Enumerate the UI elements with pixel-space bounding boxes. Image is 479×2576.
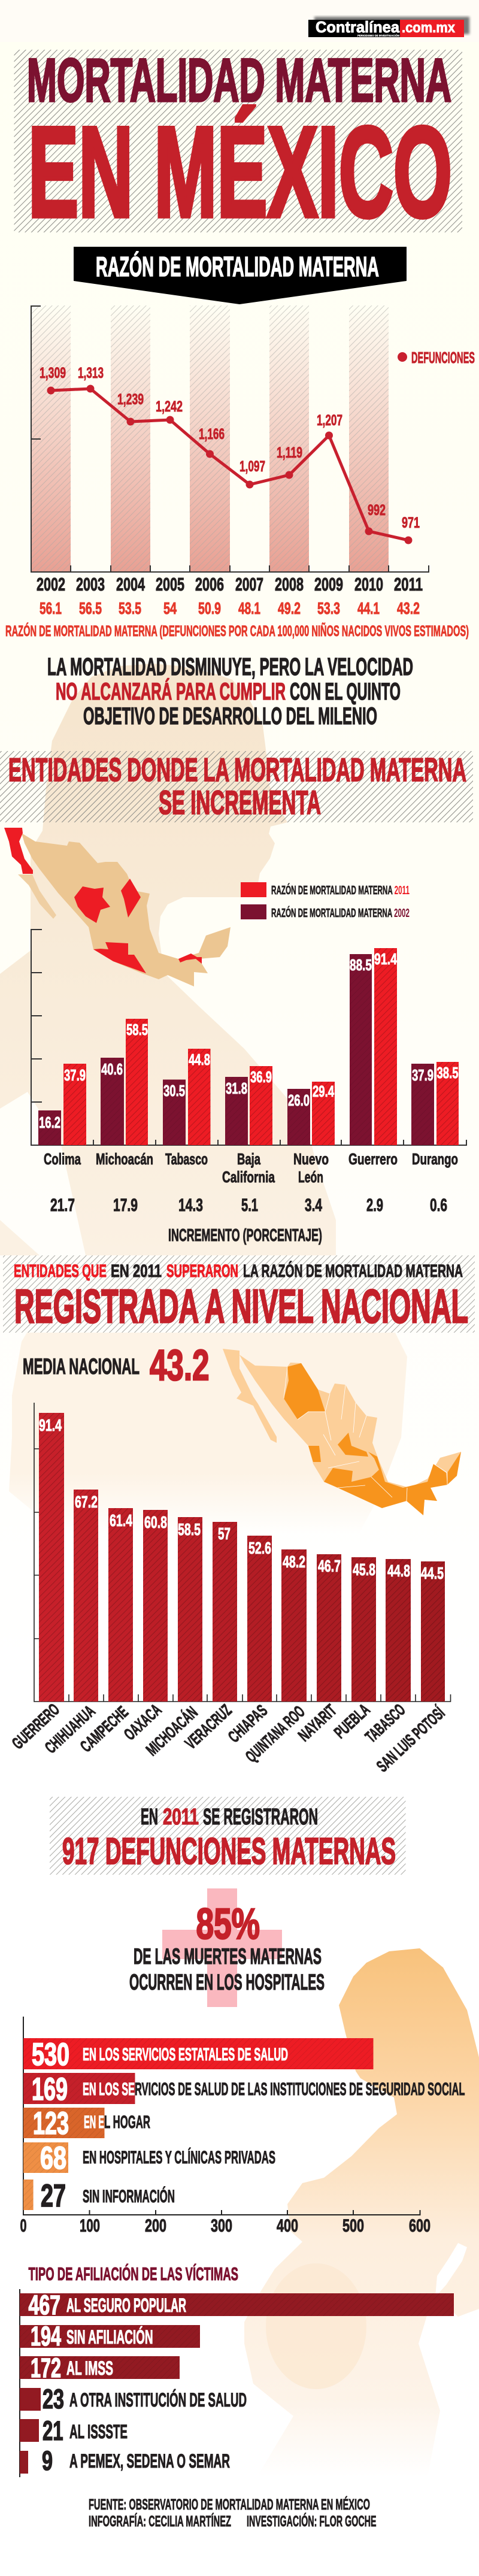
axis labels: 400 [277, 2216, 298, 2236]
year labels: 2008 [275, 574, 304, 595]
bar: 23: A OTRA INSTITUCIÓN DE SALUD [69, 2389, 247, 2411]
increment values: 5.1 [241, 1195, 258, 1215]
map: entidades con incremento [4, 828, 231, 986]
rate values: 54 [163, 599, 177, 617]
bar: 467 [20, 2290, 454, 2320]
bar: 21 [20, 2415, 128, 2446]
bar: 530: EN LOS SERVICIOS ESTATALES DE SALUD [83, 2045, 288, 2065]
year labels: 2006 [195, 574, 224, 595]
bar: 172: AL IMSS [66, 2357, 113, 2379]
axes [34, 1403, 450, 1702]
rate values: 48.1 [238, 599, 260, 617]
data labels: 1,239 [117, 391, 144, 408]
Durango bars: 38.5 [437, 1064, 459, 1082]
data labels: 1,242 [156, 398, 183, 415]
footer credits [89, 2496, 376, 2530]
Colima bars: 16.2 [39, 1113, 60, 1131]
bar values: 48.2 [283, 1552, 305, 1571]
rotated state labels: GUERRERO [8, 1700, 63, 1752]
rate values [40, 599, 420, 617]
state labels: Guerrero [348, 1150, 398, 1168]
state labels: Nuevo [293, 1150, 329, 1168]
bar values: 58.5 [178, 1520, 201, 1539]
text block: mortalidad disminuye: CON EL QUINTO [290, 679, 401, 705]
heading: tipo de afiliación: TIPO DE AFILIACIÓN DE LAS VÍCTIMAS [29, 2263, 238, 2284]
state labels: Michoacán [96, 1150, 153, 1168]
rotated state labels: QUINTANA ROO [242, 1702, 308, 1766]
text block: mortalidad disminuye [47, 653, 413, 729]
rotated state labels: OAXACA [120, 1700, 165, 1743]
Michoacán bars: 58.5 [126, 1021, 148, 1039]
year labels: 2007 [235, 574, 263, 595]
legend: razón 2011 y 2002: RAZÓN DE MORTALIDAD MATERNA 2002 [271, 906, 410, 920]
bar values: 52.6 [248, 1539, 271, 1557]
year labels [37, 574, 423, 595]
logo: contralinea.com.mx: .com.mx [402, 20, 456, 36]
bar: 68 [23, 2141, 275, 2176]
Durango bars [411, 1062, 459, 1145]
bar: 21: 21 [43, 2415, 63, 2446]
increment values: 3.4 [305, 1195, 322, 1215]
increment values: 2.9 [366, 1195, 383, 1215]
bar: 123: L HOGAR [104, 2112, 150, 2132]
axis labels: 100 [80, 2216, 100, 2236]
bar: 123: 123 [33, 2106, 69, 2141]
bar: 169: 169 [32, 2072, 68, 2107]
bar chart: entidades 2002 vs 2011 [31, 930, 466, 1245]
rate values: 53.3 [317, 599, 340, 617]
line chart: defunciones [5, 305, 475, 640]
Tabasco bars: 44.8 [189, 1051, 210, 1068]
state labels: Tabasco [165, 1150, 208, 1168]
rotated state labels: PUEBLA [331, 1700, 374, 1742]
bar values: 67.2 [75, 1493, 98, 1511]
increment values [50, 1195, 447, 1215]
icon: hospital cross [162, 1888, 282, 2007]
Michoacán bars [101, 1019, 148, 1145]
heading panel: registrada a nivel nacional: SUPERARON [166, 1261, 238, 1281]
rotated state labels: CAMPECHE [77, 1703, 132, 1755]
logo: contralinea.com.mx [308, 17, 469, 37]
rate values: 43.2 [397, 599, 420, 617]
rate values: 50.9 [198, 599, 221, 617]
rotated state labels [8, 1700, 448, 1775]
rotated state labels: CHIAPAS [225, 1701, 271, 1746]
data labels: 971 [402, 514, 420, 531]
text block: 85%: 85% [196, 1900, 260, 1948]
data labels: 1,166 [199, 426, 225, 443]
Nuevo León bars: 29.4 [313, 1082, 334, 1100]
data labels: 1,313 [78, 365, 104, 382]
Guerrero bars: 88.5 [350, 956, 372, 974]
increment values: 14.3 [178, 1195, 203, 1215]
Guerrero bars [350, 948, 397, 1145]
axis labels [20, 2216, 431, 2236]
bar: 9 [20, 2445, 230, 2476]
bar values: 61.4 [110, 1511, 132, 1530]
bars [39, 1413, 445, 1702]
bar values: 60.8 [144, 1513, 167, 1531]
map: entidades que superan la media [223, 1349, 461, 1515]
bar values: 44.8 [387, 1561, 410, 1580]
text block: 85%: OCURREN EN LOS HOSPITALES [129, 1970, 325, 1994]
data labels: 1,097 [240, 458, 265, 475]
bar: 172 [20, 2353, 180, 2383]
legend: razón 2011 y 2002 [241, 882, 410, 920]
data labels: 1,207 [317, 412, 342, 429]
legend: razón 2011 y 2002: RAZÓN DE MORTALIDAD MATERNA 2011 [271, 883, 410, 897]
bar chart: entidades sobre la media [8, 1403, 451, 1775]
state labels: León [298, 1168, 323, 1186]
Baja California bars [225, 1066, 272, 1145]
heading panel: registrada a nivel nacional [3, 1255, 475, 1333]
Guerrero bars: 91.4 [374, 950, 397, 968]
rotated state labels: CHIHUAHUA [41, 1702, 99, 1757]
rotated state labels: MICHOACÁN [143, 1703, 201, 1759]
Baja California bars: 36.9 [250, 1068, 272, 1086]
data labels: 992 [368, 502, 386, 519]
bar: 9: A PEMEX, SEDENA O SEMAR [69, 2450, 230, 2472]
logo: contralinea.com.mx: PERIODISMO DE INVESTIGACIÓN [357, 33, 399, 37]
bar: 23 [20, 2384, 247, 2414]
title panel [14, 46, 462, 244]
axis labels: 0 [20, 2216, 26, 2236]
bar values [39, 1416, 444, 1582]
Colima bars [38, 1064, 86, 1145]
state labels: Durango [412, 1150, 458, 1168]
increment caption: INCREMENTO (PORCENTAJE) [168, 1226, 322, 1245]
Colima bars: 37.9 [64, 1066, 86, 1084]
data labels: 1,309 [40, 365, 66, 382]
heading panel: entidades donde se incrementa: SE INCREMENTA [159, 783, 321, 821]
data labels [40, 365, 420, 531]
year labels: 2004 [116, 574, 145, 595]
striped year bands [31, 305, 389, 572]
bar: 123 [23, 2106, 150, 2141]
state labels [44, 1150, 458, 1186]
heading panel: registrada a nivel nacional: ENTIDADES QUE [14, 1261, 107, 1281]
axis [19, 2289, 20, 2477]
Tabasco bars [163, 1049, 211, 1145]
bar: 169 [23, 2072, 465, 2107]
bar values: 45.8 [353, 1560, 375, 1579]
bar: 467: 467 [29, 2290, 60, 2320]
panel: 917 defunciones maternas: SE REGISTRARON [203, 1805, 318, 1830]
text block: 85%: DE LAS MUERTES MATERNAS [134, 1944, 322, 1969]
bar: 21: AL ISSSTE [69, 2421, 128, 2442]
bar: 172: 172 [31, 2353, 61, 2383]
state labels: Baja [237, 1150, 260, 1168]
bar: 194 [20, 2321, 200, 2351]
bar: 23: 23 [43, 2384, 64, 2414]
bar: 123: EN E [84, 2112, 104, 2132]
Michoacán bars: 40.6 [101, 1060, 123, 1078]
heading panel: entidades donde se incrementa [0, 751, 473, 822]
axis labels: 300 [211, 2216, 232, 2236]
panel: 917 defunciones maternas [50, 1797, 406, 1875]
rate values: 56.5 [79, 599, 102, 617]
rotated state labels: VERACRUZ [181, 1701, 235, 1752]
rate values: 49.2 [278, 599, 301, 617]
panel: 917 defunciones maternas: EN [141, 1805, 158, 1830]
footer credits: INFOGRAFÍA: CECILIA MARTÍNEZ [89, 2513, 231, 2530]
media nacional: MEDIA NACIONAL [23, 1354, 140, 1379]
year labels: 2011 [394, 574, 423, 595]
state labels: Colima [44, 1150, 81, 1168]
bar: 194: SIN AFILIACIÓN [66, 2326, 153, 2348]
bar values: 91.4 [39, 1416, 62, 1434]
bar: 27: SIN INFORMACIÓN [83, 2186, 175, 2206]
bar: 27: 27 [41, 2178, 66, 2214]
bar: 467: AL SEGURO POPULAR [66, 2295, 186, 2316]
data line [47, 385, 412, 544]
increment values: 21.7 [50, 1195, 75, 1215]
bar: 68: 68 [40, 2141, 66, 2176]
increment values: 17.9 [113, 1195, 138, 1215]
bar chart: lugar de la defunción [20, 2017, 465, 2236]
bar: 9: 9 [42, 2445, 53, 2476]
axis labels: 500 [342, 2216, 364, 2236]
axis labels: 200 [145, 2216, 166, 2236]
bar: 530: 530 [32, 2037, 69, 2072]
bar: 169: EN LOS SE [83, 2079, 135, 2099]
Baja California bars: 31.8 [226, 1079, 247, 1097]
banner: razón de mortalidad materna [74, 247, 407, 304]
year labels: 2005 [156, 574, 184, 595]
axis labels: 600 [409, 2216, 431, 2236]
rate values: 56.1 [40, 599, 62, 617]
bar values: 46.7 [318, 1557, 341, 1575]
logo: contralinea.com.mx: Contralínea [316, 18, 400, 36]
illustration: mother and baby silhouette lower [244, 1948, 479, 2477]
Tabasco bars: 30.5 [163, 1082, 185, 1100]
bar: 530 [23, 2037, 374, 2072]
media nacional: 43.2 [150, 1342, 210, 1390]
Nuevo León bars: 26.0 [288, 1091, 310, 1109]
year labels: 2002 [37, 574, 65, 595]
bar: 27 [23, 2178, 175, 2214]
rotated state labels: NAYARIT [295, 1701, 340, 1745]
year labels: 2010 [354, 574, 383, 595]
bar values: 44.5 [421, 1564, 444, 1582]
footer credits: INVESTIGACIÓN: FLOR GOCHE [247, 2512, 376, 2530]
heading panel: registrada a nivel nacional: EN 2011 [111, 1261, 162, 1281]
bar chart: tipo de afiliación [20, 2289, 454, 2477]
panel: 917 defunciones maternas: 2011 [163, 1805, 199, 1830]
Durango bars: 37.9 [412, 1066, 433, 1084]
axes [31, 306, 429, 572]
rate values: 53.5 [119, 599, 141, 617]
illustration: woman silhouette upper [0, 664, 407, 1533]
year labels: 2009 [314, 574, 343, 595]
bar: 194: 194 [31, 2321, 61, 2351]
state labels: California [222, 1168, 275, 1186]
rotated state labels: TABASCO [362, 1700, 409, 1746]
axes [31, 930, 466, 1145]
increment values: 0.6 [430, 1195, 447, 1215]
data labels: 1,119 [277, 444, 302, 461]
bar values: 57 [218, 1524, 231, 1543]
year labels: 2003 [76, 574, 105, 595]
bar: 68: EN HOSPITALES Y CLÍNICAS PRIVADAS [83, 2147, 275, 2168]
text block: mortalidad disminuye: NO ALCANZARÁ PARA CUMPLIR [56, 678, 286, 705]
media nacional [23, 1342, 210, 1390]
axes [23, 2017, 420, 2215]
Nuevo León bars [287, 1082, 335, 1145]
text block: 85% [129, 1900, 325, 1994]
rate values: 44.1 [357, 599, 380, 617]
